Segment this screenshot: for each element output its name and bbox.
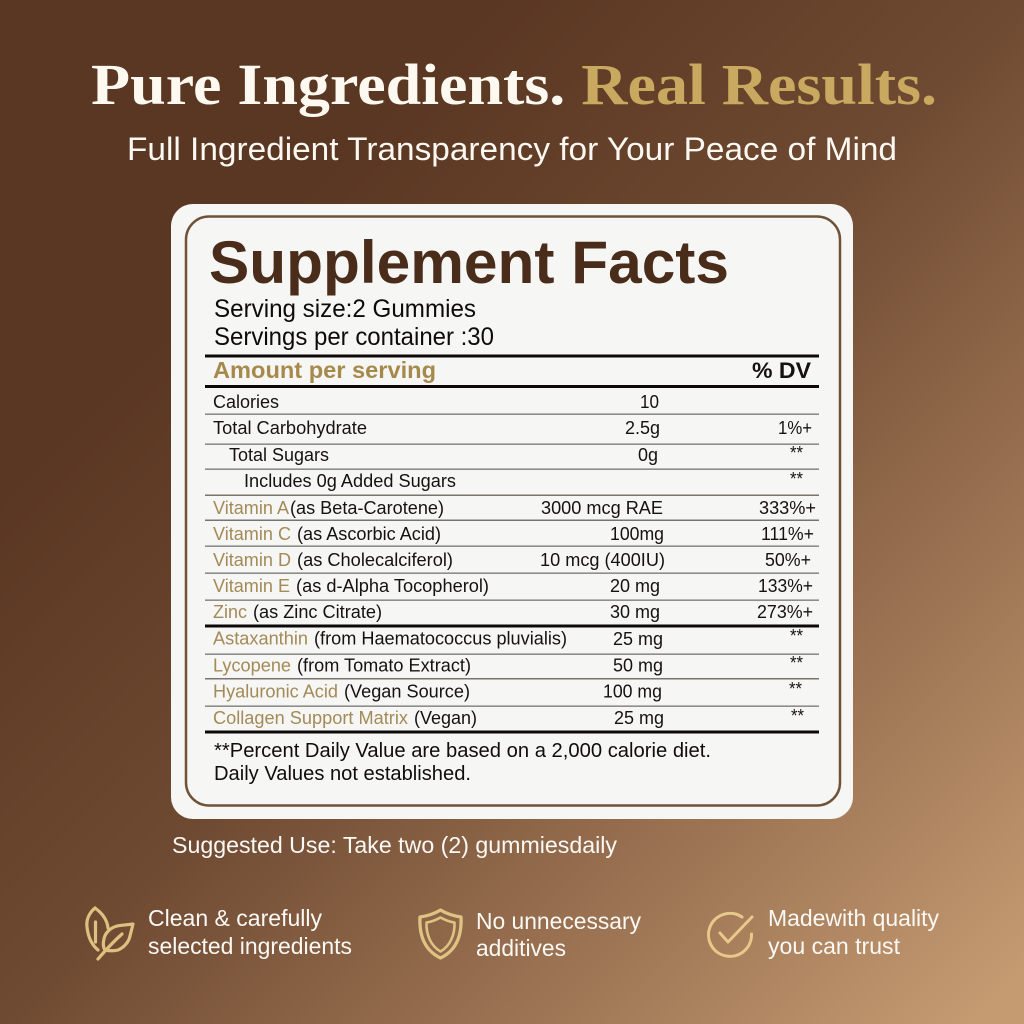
row: zinc: 30 mg (610, 602, 660, 622)
subtitle: Full Ingredient Transparency for Your Peace of Mind (127, 131, 897, 167)
row: added sugars: Includes 0g Added Sugars (244, 471, 456, 491)
row: vitamin d: 50%+ (765, 550, 811, 570)
row: vitamin d: Vitamin D (213, 550, 291, 570)
row: vitamin a: 333%+ (759, 498, 816, 518)
row: vitamin c: 111%+ (761, 524, 814, 544)
serving size: Serving size:2 Gummies (214, 295, 476, 323)
row: collagen support matrix: ** (791, 706, 804, 726)
footnote: Daily Values not established. (214, 763, 471, 785)
row: total carbohydrate: 1%+ (778, 418, 812, 438)
row: total sugars: Total Sugars (229, 445, 329, 465)
row: vitamin e: 133%+ (758, 576, 813, 596)
row: vitamin e (213, 576, 813, 596)
row: total sugars (229, 443, 803, 465)
row: vitamin d: 10 mcg (400IU) (540, 550, 665, 570)
row: vitamin d (213, 550, 811, 570)
row: total carbohydrate: 2.5g (625, 418, 660, 438)
row: total sugars: ** (790, 443, 803, 463)
row: vitamin e: (as d-Alpha Tocopherol) (296, 576, 489, 596)
row: hyaluronic acid: ** (789, 679, 802, 699)
row: zinc: 273%+ (757, 602, 813, 622)
row: hyaluronic acid: (Vegan Source) (344, 682, 470, 702)
row: lycopene: 50 mg (613, 656, 663, 676)
benefit: clean ingredients: selected ingredients (148, 933, 352, 959)
footnote (214, 740, 711, 785)
row: total sugars: 0g (638, 445, 658, 465)
row: vitamin a: 3000 mcg RAE (541, 498, 663, 518)
benefit: quality: you can trust (768, 933, 901, 959)
row: vitamin a: Vitamin A (213, 498, 289, 518)
row: lycopene: Lycopene (213, 656, 291, 676)
row: collagen support matrix: (Vegan) (414, 708, 477, 728)
icon: leaves (87, 908, 133, 959)
row: calories (213, 392, 659, 412)
benefit: no additives (476, 908, 641, 961)
suggested use: Suggested Use: Take two (2) gummiesdaily (172, 832, 617, 858)
benefit: no additives: additives (476, 935, 566, 961)
benefit: quality: Madewith quality (768, 905, 939, 931)
row: zinc: (as Zinc Citrate) (253, 602, 382, 622)
row: hyaluronic acid: Hyaluronic Acid (213, 682, 338, 702)
row: astaxanthin (213, 626, 803, 649)
benefit: no additives: No unnecessary (476, 908, 641, 934)
row: astaxanthin: 25 mg (613, 629, 663, 649)
row: collagen support matrix: Collagen Support Matrix (213, 708, 408, 728)
icon: shield (420, 910, 461, 958)
row: vitamin e: 20 mg (610, 576, 660, 596)
panel: supplement facts card (171, 204, 853, 819)
row: zinc (213, 602, 813, 622)
row: lycopene: (from Tomato Extract) (297, 656, 471, 676)
row: astaxanthin: ** (790, 626, 803, 646)
row: vitamin e: Vitamin E (213, 576, 290, 596)
row: vitamin c: (as Ascorbic Acid) (297, 524, 441, 544)
row: calories: 10 (640, 392, 659, 412)
row: total carbohydrate (213, 418, 812, 438)
card inner border (186, 216, 840, 806)
row: vitamin a (213, 498, 816, 518)
row: added sugars (244, 469, 803, 491)
row: calories: Calories (213, 392, 279, 412)
row: collagen support matrix: 25 mg (614, 708, 664, 728)
row: total carbohydrate: Total Carbohydrate (213, 418, 367, 438)
row: vitamin c: Vitamin C (213, 524, 291, 544)
row: hyaluronic acid (213, 679, 802, 702)
row: lycopene: ** (790, 653, 803, 673)
row: hyaluronic acid: 100 mg (603, 682, 662, 702)
row: vitamin c (213, 524, 814, 544)
column header: amount per serving: Amount per serving (213, 357, 436, 383)
heading: Supplement Facts (209, 229, 729, 296)
benefit: clean ingredients (148, 905, 352, 959)
row: vitamin d: (as Cholecalciferol) (297, 550, 453, 570)
footnote: **Percent Daily Value are based on a 2,000 calorie diet. (214, 740, 711, 762)
benefit: quality (768, 905, 939, 959)
servings per container: Servings per container :30 (214, 323, 494, 351)
benefit: clean ingredients: Clean & carefully (148, 905, 322, 931)
icon: check circle (709, 913, 752, 956)
card background (171, 204, 853, 819)
row: lycopene (213, 653, 803, 676)
row: vitamin c: 100mg (610, 524, 664, 544)
row: astaxanthin: Astaxanthin (213, 628, 308, 648)
row: astaxanthin: (from Haematococcus pluvialis) (314, 628, 567, 648)
row: added sugars: ** (790, 469, 803, 489)
row: collagen support matrix (213, 706, 804, 728)
row: vitamin a: (as Beta-Carotene) (290, 498, 444, 518)
column header: percent daily value: % DV (752, 358, 811, 383)
title: Pure Ingredients. Real Results. (91, 52, 937, 117)
row: zinc: Zinc (213, 602, 247, 622)
